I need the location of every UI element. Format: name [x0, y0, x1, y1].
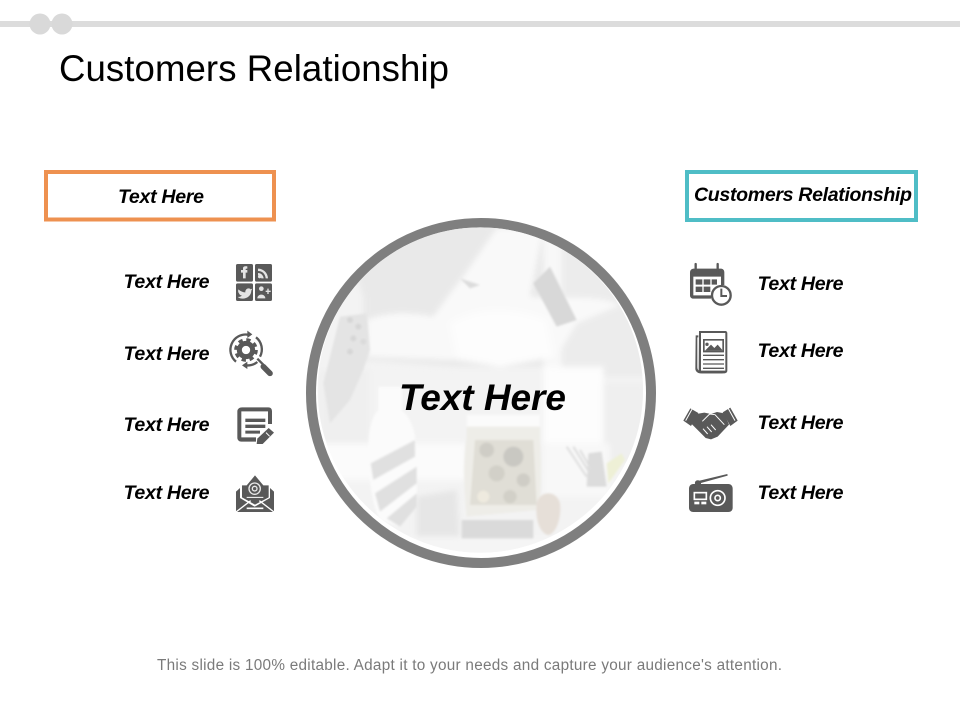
right column labels	[758, 273, 844, 504]
left column labels: Text Here	[124, 482, 210, 504]
top decoration bar	[0, 14, 960, 34]
icon: email envelope	[236, 475, 274, 512]
right header box	[687, 172, 916, 220]
center label: Text Here	[399, 377, 566, 418]
jar	[464, 428, 540, 516]
icon: handshake	[683, 408, 738, 439]
right column labels: Text Here	[758, 273, 844, 295]
right column labels: Text Here	[758, 412, 844, 434]
icon: social media	[236, 264, 272, 301]
pot and pencils	[536, 493, 560, 535]
title: Customers Relationship	[59, 48, 449, 89]
footer note: This slide is 100% editable. Adapt it to your needs and capture your audience's attention.	[157, 657, 782, 674]
right header box: Customers Relationship	[694, 184, 912, 206]
right icons	[683, 264, 738, 512]
left header box: Text Here	[118, 186, 204, 208]
left column labels: Text Here	[124, 343, 210, 365]
right column labels: Text Here	[758, 482, 844, 504]
left column labels: Text Here	[124, 414, 210, 436]
left header box	[46, 172, 274, 220]
left icons	[230, 264, 274, 512]
icon: note and pencil	[237, 407, 274, 444]
icon: calendar clock	[690, 264, 731, 305]
ring	[311, 223, 651, 563]
icon: newspaper	[695, 331, 727, 373]
faded photo	[310, 220, 650, 557]
left column labels: Text Here	[124, 271, 210, 293]
icon: gear search	[230, 331, 270, 373]
left column labels	[124, 271, 210, 504]
right column labels: Text Here	[758, 340, 844, 362]
icon: radio	[689, 474, 733, 512]
bottle	[368, 387, 417, 527]
central photo circle	[310, 220, 651, 563]
